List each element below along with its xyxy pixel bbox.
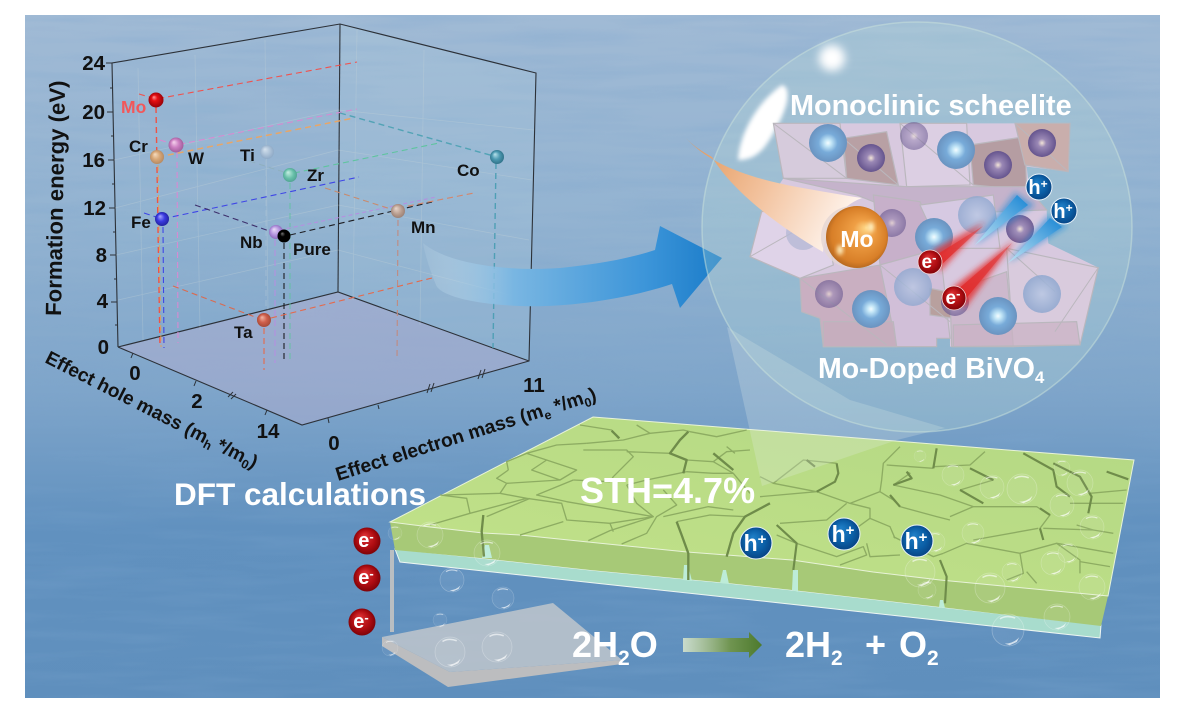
surface cracks, dark fissures left — [482, 431, 770, 580]
crystal atoms — [786, 122, 1061, 335]
element labels: Mn — [411, 218, 436, 237]
axis tick labels: 20 — [82, 101, 105, 124]
hole spheres in crystal: h — [1028, 177, 1041, 199]
blue hole beams — [975, 192, 1068, 263]
hole mass axis title: Effect hole mass (m — [42, 348, 211, 448]
reaction: products: O — [899, 624, 927, 665]
element labels: Ta — [234, 323, 253, 342]
electron mass axis title: 0 — [583, 395, 594, 410]
crystal polyhedra — [750, 123, 1098, 347]
electron spheres in crystal: e — [922, 252, 932, 273]
axis tick labels: 16 — [82, 149, 105, 172]
axis tick labels: 0 — [98, 336, 109, 359]
electron mass axis title: e — [542, 407, 553, 423]
dashed guide lines — [139, 62, 497, 370]
bubble highlight streak — [738, 85, 788, 160]
reaction: products: 2 — [927, 647, 939, 670]
element labels: Nb — [240, 233, 263, 252]
electron spheres on wire: - — [364, 610, 369, 625]
water bubbles — [382, 450, 1105, 667]
gray metal counter electrode — [382, 550, 622, 687]
electron spheres on wire: - — [369, 529, 374, 544]
axis tick labels: 8 — [96, 244, 107, 267]
axis tick labels: 2 — [191, 390, 203, 413]
electron spheres in crystal — [918, 250, 966, 310]
electron spheres on wire — [348, 528, 380, 636]
axis tick labels: 0 — [129, 362, 141, 385]
hole spheres in crystal: + — [1066, 201, 1073, 215]
Mo comet tail — [685, 137, 862, 252]
electron spheres on wire: e — [358, 567, 369, 589]
hole spheres on film: h — [832, 521, 846, 547]
electron spheres on wire: e — [353, 611, 364, 633]
axis tick labels — [82, 52, 545, 455]
axis tick labels: 24 — [82, 52, 106, 75]
data spheres — [148, 92, 504, 327]
surface cracks, dark fissures right — [777, 448, 1128, 603]
electron spheres on wire: - — [369, 566, 374, 581]
Mo dopant sphere — [821, 206, 888, 268]
film top surface — [390, 417, 1134, 596]
faint grid lines — [114, 30, 534, 340]
hole mass axis title: h — [201, 437, 214, 453]
reaction: products: + — [865, 624, 886, 665]
reaction: products: 2H — [785, 624, 831, 665]
hole spheres on film: + — [846, 522, 855, 539]
bubble highlight spot — [819, 45, 845, 71]
surface cracks, right half — [760, 447, 1127, 583]
hole spheres on film: + — [919, 529, 928, 546]
hole spheres in crystal — [1026, 174, 1077, 224]
front face seams — [482, 545, 945, 608]
element labels: Co — [457, 161, 480, 180]
axis tick labels: 14 — [257, 420, 280, 443]
electron mass axis title: */m — [546, 388, 586, 419]
green BiVO4 film — [390, 417, 1134, 638]
electron spheres in crystal: e — [946, 288, 956, 309]
hole mass axis title: ) — [246, 452, 261, 473]
element labels: Fe — [131, 213, 151, 232]
heading: Monoclinic scheelite: Monoclinic scheelite — [790, 90, 1072, 122]
heading: Mo-Doped BiVO4: 4 — [1035, 368, 1045, 387]
element labels: W — [188, 149, 205, 168]
hole spheres on film: h — [905, 528, 919, 554]
electron spheres in crystal: - — [956, 286, 960, 301]
electron mass axis title: Effect electron mass (m — [333, 401, 546, 486]
hole spheres in crystal: + — [1041, 177, 1048, 191]
element labels: Cr — [129, 137, 148, 156]
chart walls and floor — [106, 24, 536, 425]
element labels: Ti — [240, 146, 255, 165]
reaction arrow — [683, 632, 762, 658]
hole mass axis title: 0 — [239, 457, 251, 472]
element labels: Mo — [121, 97, 146, 117]
magnifier cone — [727, 327, 945, 486]
surface cracks, left half — [430, 425, 750, 544]
element labels: Pure — [293, 240, 331, 259]
reaction: reactant: 2H — [572, 624, 618, 665]
y axis title: Formation energy (eV) — [41, 80, 70, 316]
axis tick labels: 12 — [83, 197, 106, 220]
axis tick labels: 11 — [523, 374, 545, 397]
STH efficiency label: STH=4.7% — [580, 470, 755, 511]
hole spheres on film — [740, 518, 933, 559]
red electron beams — [933, 222, 1015, 308]
reaction: reactant: O — [630, 624, 658, 665]
blue curved arrow — [423, 226, 722, 308]
element labels — [121, 97, 480, 342]
axis tick labels: 0 — [328, 432, 340, 455]
electron mass axis title: ) — [587, 384, 599, 406]
substrate layer — [395, 549, 1101, 638]
film front face — [390, 522, 1108, 626]
hole spheres on film: h — [744, 530, 758, 556]
bubble circle — [702, 22, 1132, 432]
reaction: reactant: 2 — [618, 647, 630, 670]
magnified crystal bubble — [685, 22, 1132, 432]
hole spheres in crystal: h — [1053, 201, 1066, 223]
hole spheres on film: + — [758, 531, 767, 548]
DFT calculations label: DFT calculations — [174, 476, 426, 512]
Mo dopant sphere: Mo — [840, 226, 874, 252]
axis tick labels: 4 — [97, 290, 109, 313]
hole mass axis title: */m — [208, 433, 249, 467]
electron spheres in crystal: - — [932, 250, 936, 265]
reaction: products: 2 — [831, 647, 843, 670]
3D formation energy chart — [41, 24, 600, 488]
heading: Mo-Doped BiVO4: Mo-Doped BiVO — [818, 353, 1035, 385]
electron spheres on wire: e — [358, 530, 369, 552]
element labels: Zr — [307, 166, 324, 185]
